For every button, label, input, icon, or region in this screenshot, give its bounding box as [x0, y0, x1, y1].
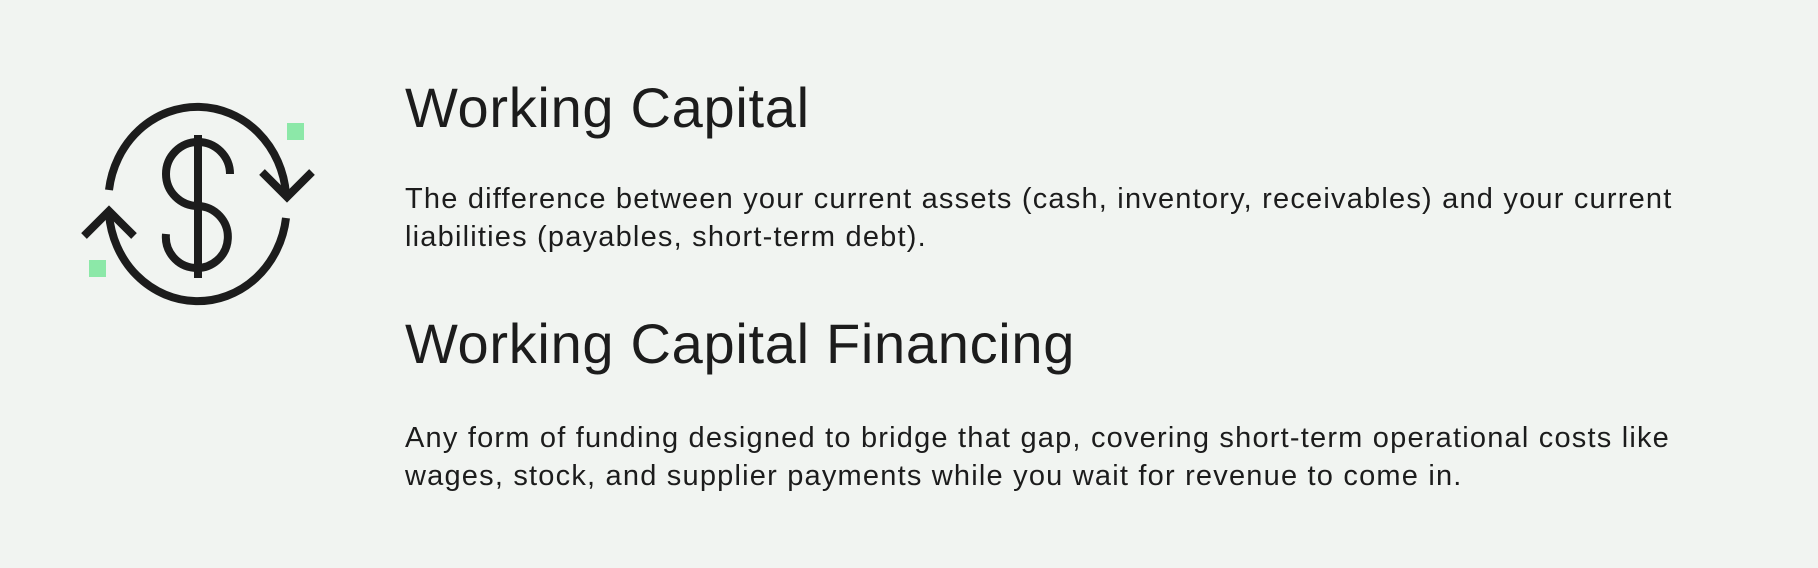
icon: circular arrows with dollar sign — [81, 102, 315, 306]
heading: Working Capital: Working Capital — [405, 76, 810, 139]
text: working capital definition: liabilities (payables, short-term debt). — [405, 221, 927, 253]
green square top right — [287, 123, 304, 140]
text: working capital definition — [405, 183, 1673, 253]
heading: Working Capital Financing: Working Capital Financing — [405, 312, 1075, 375]
dollar sign — [166, 135, 230, 278]
green square bottom left — [89, 260, 106, 277]
upper arc arrow — [109, 107, 312, 197]
lower arc arrow — [84, 211, 286, 301]
text: financing definition — [405, 422, 1670, 492]
text: financing definition: wages, stock, and supplier payments while you wait for revenue to come in. — [405, 460, 1463, 492]
text: financing definition: Any form of funding designed to bridge that gap, covering short-term operational costs like — [405, 422, 1670, 454]
text: working capital definition: The difference between your current assets (cash, inventory, receivables) and your current — [405, 183, 1673, 215]
